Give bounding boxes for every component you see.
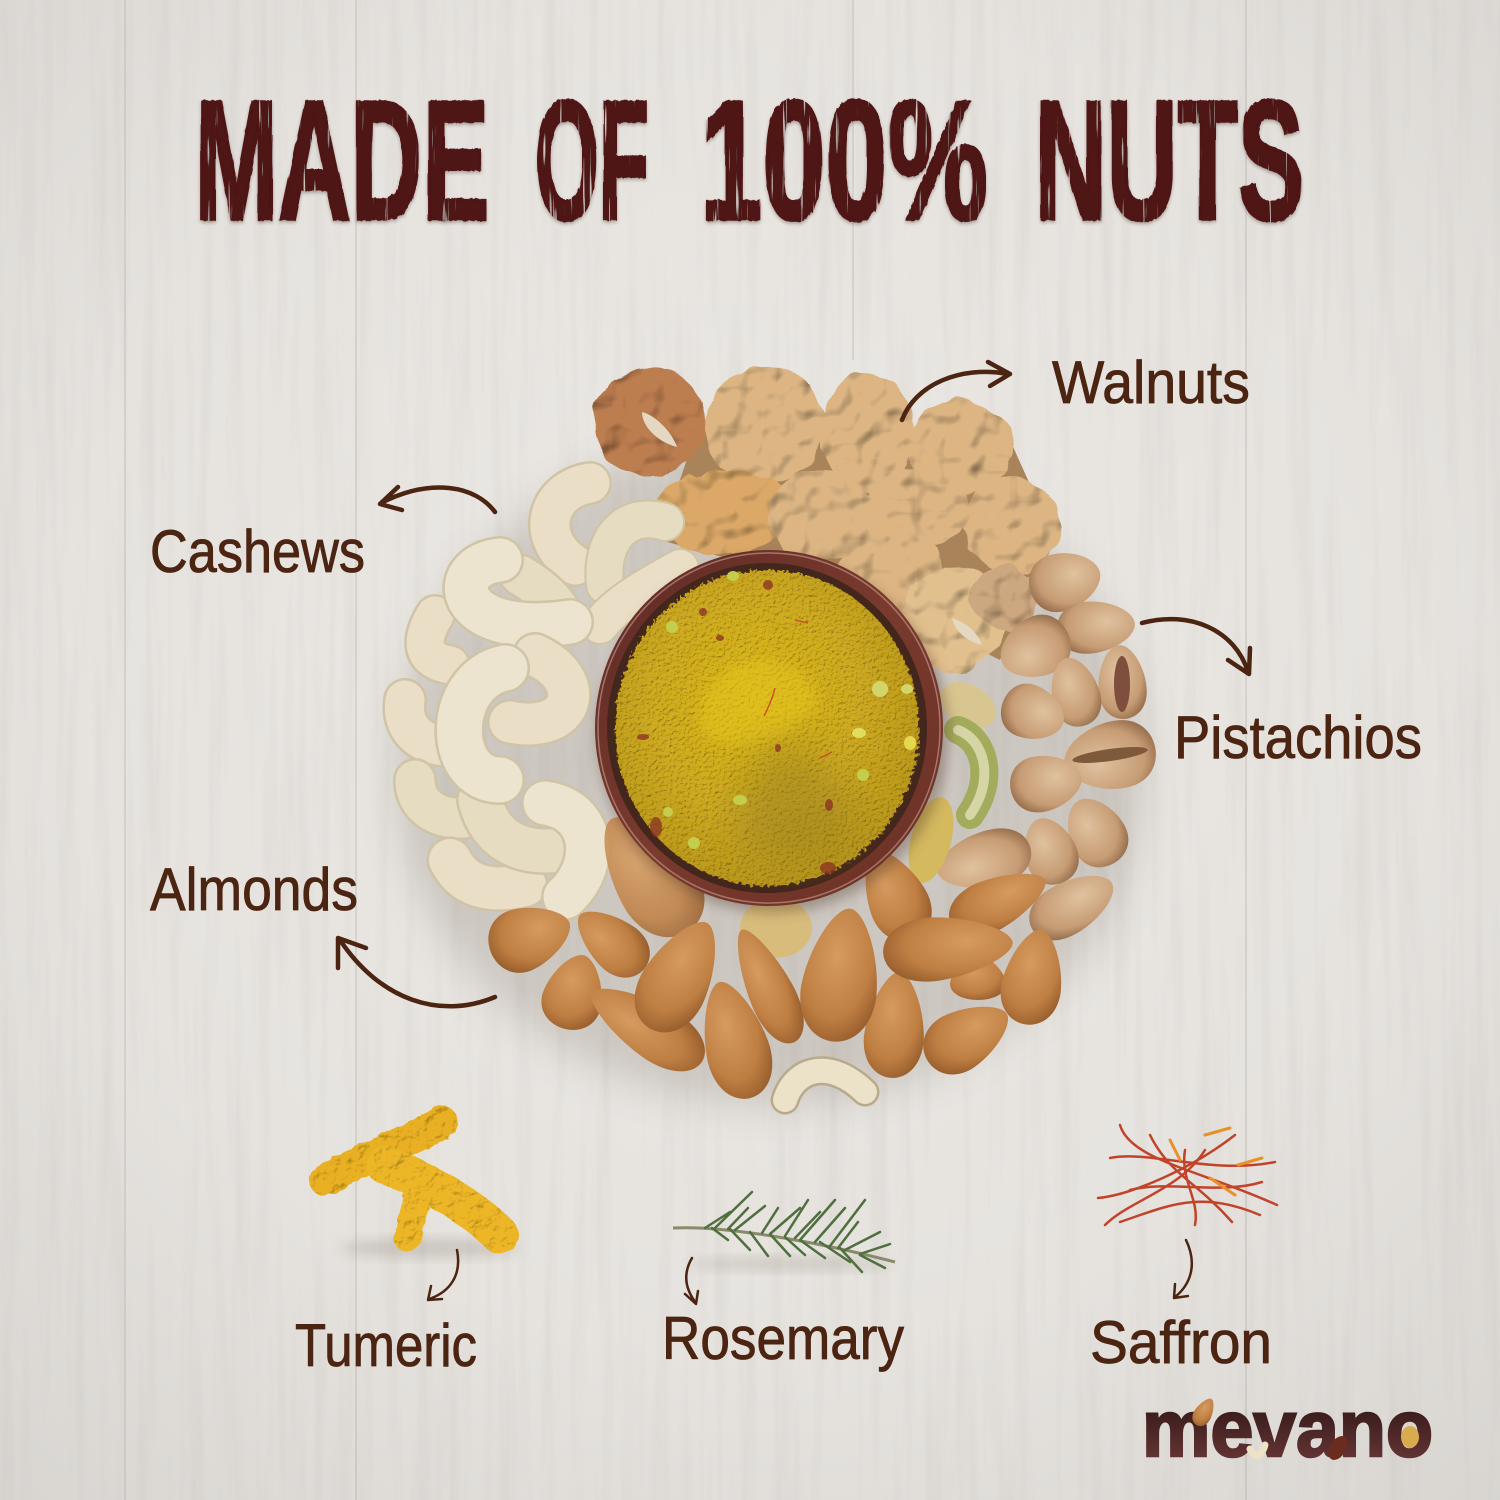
pistachios xyxy=(900,544,1161,952)
powder speckles xyxy=(637,571,916,874)
title xyxy=(195,66,1304,256)
label: tumeric: Tumeric xyxy=(295,1312,477,1379)
label: tumeric xyxy=(295,1250,477,1379)
label: walnuts xyxy=(902,349,1250,420)
label: saffron xyxy=(1090,1240,1272,1376)
cashews xyxy=(404,483,865,1100)
walnuts xyxy=(594,367,1060,672)
logo: mevano xyxy=(1142,1384,1433,1473)
title: NUTS xyxy=(1035,66,1304,256)
icon: rosemary xyxy=(673,1192,895,1272)
powder mound shading xyxy=(700,659,851,865)
icon: turmeric xyxy=(325,1122,520,1258)
powder xyxy=(615,570,919,886)
label: rosemary: Rosemary xyxy=(662,1305,904,1372)
label: pistachios: Pistachios xyxy=(1174,704,1422,771)
label: pistachios xyxy=(1142,619,1422,771)
walnut kernel xyxy=(642,412,677,447)
title: 100% xyxy=(700,66,988,256)
label: rosemary xyxy=(662,1258,904,1372)
label: almonds xyxy=(150,856,495,1006)
nut pile shadow xyxy=(395,435,1145,1105)
label: almonds: Almonds xyxy=(150,856,358,923)
label: saffron: Saffron xyxy=(1090,1309,1272,1376)
title: MADE xyxy=(195,66,489,256)
label: cashews xyxy=(150,487,495,585)
icon: saffron xyxy=(1098,1125,1277,1225)
title: OF xyxy=(535,66,649,256)
almonds xyxy=(480,796,1071,1106)
label: walnuts: Walnuts xyxy=(1052,349,1250,416)
label: cashews: Cashews xyxy=(150,518,365,585)
spice bowl xyxy=(595,550,949,913)
